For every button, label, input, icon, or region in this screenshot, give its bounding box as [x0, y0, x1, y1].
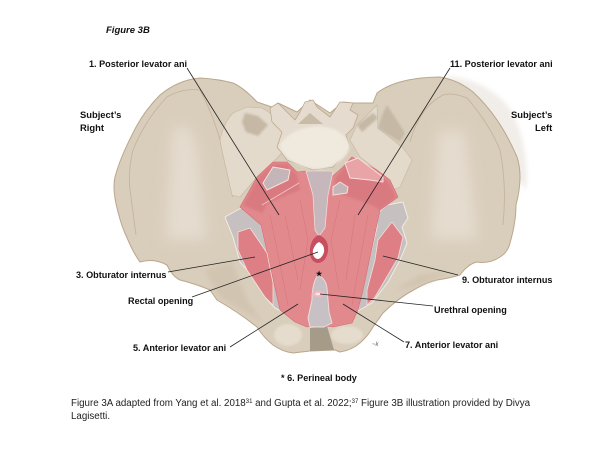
bone: left fossa highlight: [165, 125, 207, 240]
rectal opening: [310, 235, 328, 263]
urethral lumen: [316, 293, 320, 295]
label: subject's right: Subject’s: [80, 109, 121, 120]
leader line: urethral opening: [320, 294, 433, 306]
label: 1 posterior levator ani: 1. Posterior levator ani: [89, 59, 187, 69]
bone: sacroiliac right: [350, 105, 412, 190]
right small tendon patch: [333, 182, 348, 195]
rectal lumen: [313, 242, 324, 259]
upper muscle band right: [335, 159, 396, 210]
urethra gray tissue: [308, 275, 332, 327]
pelvis illustration: [114, 76, 527, 353]
caption: 31: [246, 399, 253, 405]
bone: vertebra: [270, 100, 358, 170]
bone: right stripes: [357, 113, 378, 132]
leader line: 7 anterior levator ani: [343, 304, 404, 342]
leader line: 11 posterior levator ani: [358, 68, 450, 215]
bone: lower ischium shade left: [205, 262, 262, 322]
gray tissue right: [358, 202, 408, 311]
label: 6 perineal body: * 6. Perineal body: [281, 373, 358, 383]
label: subject's left: Subject’s: [511, 109, 552, 120]
bone: left pubic lobe: [274, 324, 302, 346]
leader line: 1 posterior levator ani: [187, 68, 279, 215]
upper muscle band left: [243, 164, 300, 213]
bone: left fossa line: [129, 90, 233, 235]
label: subject's right: Right: [80, 122, 104, 133]
bone: lower ischium shade right: [395, 272, 450, 290]
caption: Lagisetti.: [71, 411, 110, 422]
obturator internus left: [238, 228, 273, 305]
label: 11 posterior levator ani: 11. Posterior levator ani: [450, 59, 553, 69]
bone: sacroiliac left: [220, 107, 285, 197]
label: 9 obturator internus: 9. Obturator internus: [462, 275, 552, 285]
leader line: 9 obturator internus: [383, 256, 458, 275]
bone: pelvis base: [114, 77, 520, 353]
label: urethral opening: Urethral opening: [434, 305, 507, 315]
central raphe: [306, 171, 333, 236]
right light muscle patch: [345, 158, 383, 182]
label: 7 anterior levator ani: 7. Anterior levator ani: [405, 340, 498, 350]
levator ani muscle: [240, 157, 398, 327]
leader line: rectal opening: [192, 252, 318, 297]
label: rectal opening: Rectal opening: [128, 296, 193, 306]
bone: spinal canal: [298, 113, 323, 124]
bone: right fossa highlight: [430, 130, 478, 240]
soft shadow behind right wing: [445, 76, 527, 190]
caption: and Gupta et al. 2022;: [252, 398, 352, 409]
left muscle highlight line: [262, 183, 299, 205]
figure title: Figure 3B: [106, 25, 150, 36]
urethral opening: [312, 291, 324, 297]
bone: right fossa line: [410, 94, 504, 225]
bone: right joint shading: [378, 105, 405, 142]
label: 5 anterior levator ani: 5. Anterior levator ani: [133, 343, 226, 353]
left tendon patch: [263, 167, 290, 190]
leader line: 3 obturator internus: [168, 257, 255, 272]
artist signature: ~k: [372, 342, 380, 348]
gray tissue left: [225, 207, 281, 311]
leader line: 5 anterior levator ani: [230, 304, 298, 347]
caption: Figure 3B illustration provided by Divya: [358, 398, 531, 409]
label: 3 obturator internus: 3. Obturator internus: [76, 270, 166, 280]
bone: sacrum body: [279, 126, 350, 169]
bone: pubic symphysis shadow: [310, 326, 334, 351]
label: subject's left: Left: [535, 122, 552, 133]
bone: left joint shading: [242, 113, 268, 136]
caption: Figure 3A adapted from Yang et al. 2018: [71, 398, 246, 409]
muscle fibre lines: [270, 200, 368, 305]
star: perineal body: ★: [315, 270, 323, 280]
obturator internus right: [367, 222, 403, 305]
caption: 37: [352, 399, 359, 405]
bone: right pubic lobe: [331, 326, 363, 344]
